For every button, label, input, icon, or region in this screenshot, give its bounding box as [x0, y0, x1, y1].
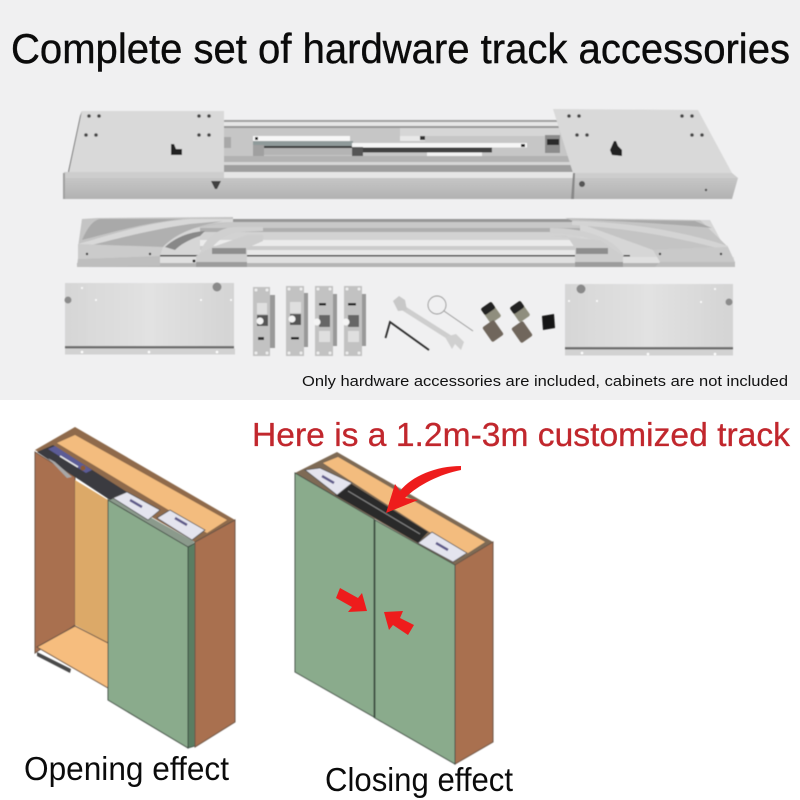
cabinet floor — [37, 626, 108, 688]
roller bracket 2 — [286, 286, 308, 356]
cabinet right wall — [195, 520, 235, 747]
left mounting plate — [64, 282, 235, 354]
callout: customized track: Here is a 1.2m-3m customized track — [252, 416, 790, 453]
note: accessories only: Only hardware accessories are included, cabinets are not included — [302, 373, 788, 390]
illustration: opening effect cabinet — [35, 427, 235, 748]
hanger plates — [113, 492, 205, 540]
slider bars — [224, 135, 560, 156]
cabinet top — [295, 452, 493, 565]
right mounting plate — [565, 284, 733, 356]
cabinet back wall — [75, 480, 108, 643]
right slide box — [553, 109, 738, 199]
caption: opening effect: Opening effect — [24, 750, 229, 787]
bottom guide — [37, 652, 71, 673]
track inside cabinet — [37, 445, 127, 500]
icon: wrench — [393, 296, 464, 350]
panel: accessories background — [0, 0, 800, 400]
right door — [375, 520, 455, 764]
cabinet right wall — [455, 542, 493, 764]
roller bracket 3 — [314, 286, 337, 356]
door seam — [374, 520, 376, 718]
icon: hex key — [386, 322, 429, 350]
arrow: left door closing — [336, 588, 367, 612]
roller bracket 1 — [253, 287, 275, 356]
icon: screw fittings — [480, 300, 533, 343]
door edge — [188, 543, 195, 748]
icon: pull ring — [428, 296, 473, 331]
accessories row — [64, 282, 733, 356]
cabinet left wall — [35, 452, 75, 653]
lower track assembly — [77, 217, 735, 267]
sliding door — [108, 500, 188, 748]
left door — [295, 473, 374, 717]
roller bracket 4 — [342, 286, 366, 356]
cabinet top — [35, 427, 235, 547]
track in place — [335, 483, 428, 543]
left slide box — [63, 111, 224, 199]
central rail — [224, 120, 573, 199]
icon: black stopper — [542, 314, 555, 330]
arrow: pointing to track — [386, 466, 461, 513]
lower track base rails — [77, 219, 735, 267]
illustration: closing effect cabinet — [295, 452, 493, 764]
right curved guide — [550, 218, 735, 267]
left curved guide — [77, 217, 263, 267]
caption: closing effect: Closing effect — [325, 761, 513, 798]
arrow: right door closing — [384, 611, 414, 635]
upper track assembly — [63, 109, 738, 199]
hanger plates — [305, 468, 467, 562]
